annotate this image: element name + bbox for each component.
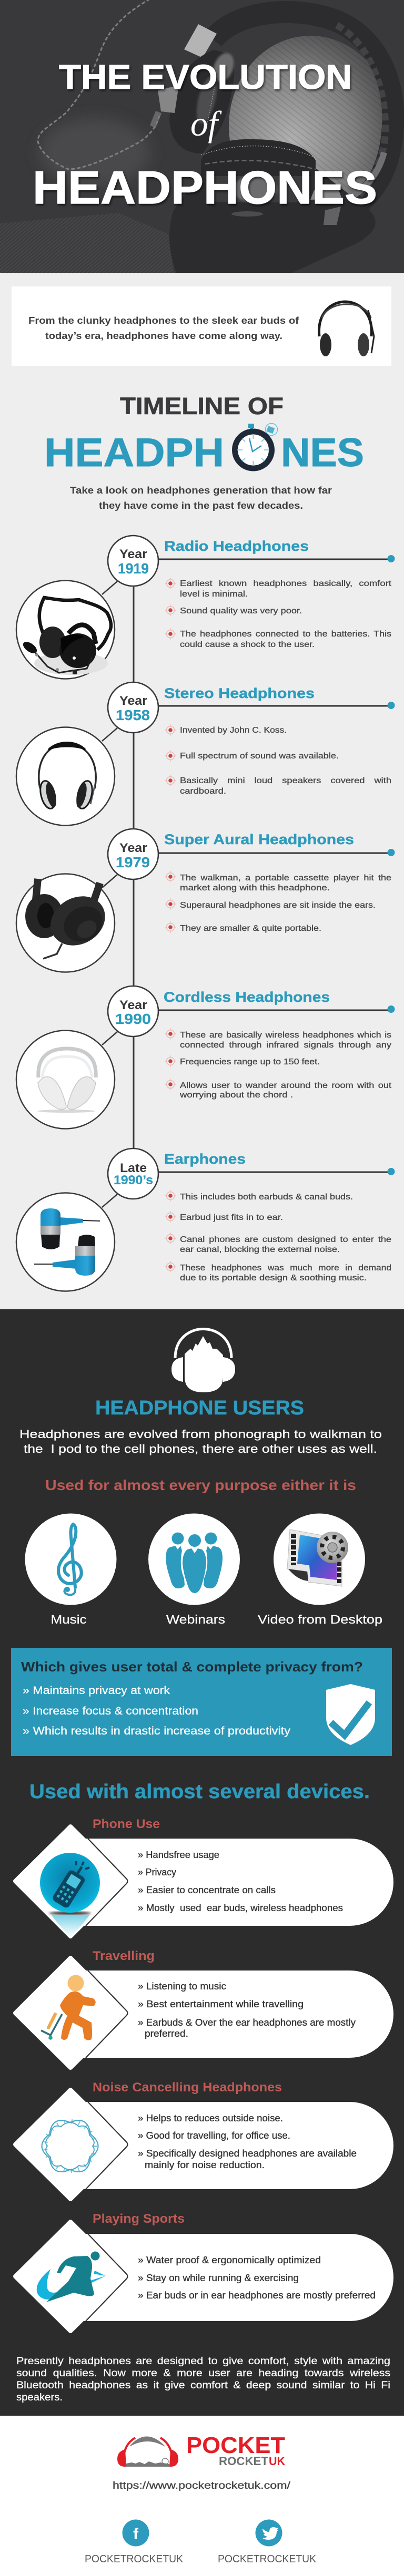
bullet list: Superaural headphones are sit inside the ears.: [180, 901, 376, 910]
list: » Listening to music: [138, 1981, 226, 1992]
heading: headphones with clock: HEADPH: [44, 430, 224, 475]
icon: runner: [37, 2252, 106, 2302]
diamond: [15, 2090, 127, 2199]
panel: earphones late 1990s: [16, 1148, 395, 1291]
privacy list: » Maintains privacy at work: [23, 1685, 170, 1697]
panel: video from desktop: [258, 1514, 382, 1626]
bullet list: The headphones connected to the batteries. This: [180, 630, 391, 639]
icon: shield check: [326, 1684, 375, 1745]
year badge: 1990’s: [114, 1173, 153, 1187]
title: Super Aural Headphones: [164, 832, 354, 847]
pill background: [79, 2102, 393, 2189]
diamond: [15, 2222, 127, 2331]
title rule: [158, 555, 395, 562]
heading: headphones with clock: NES: [281, 430, 364, 475]
pill background: [79, 1839, 393, 1926]
heading: noise cancelling: Noise Cancelling Headphones: [93, 2080, 282, 2095]
panel: privacy: [11, 1648, 392, 1756]
bullet list: Invented by John C. Koss.: [180, 726, 287, 735]
panel: super aural headphones 1979: [16, 829, 395, 972]
heading: used for almost every purpose: Used for almost every purpose either it is: [45, 1477, 356, 1493]
panel: phone use: [15, 1817, 393, 1936]
label: facebook handle: POCKETROCKETUK: [85, 2553, 184, 2565]
privacy heading: Which gives user total & complete privacy from?: [21, 1659, 363, 1675]
label: video from desktop: Video from Desktop: [258, 1613, 382, 1626]
title rule: [158, 1168, 395, 1175]
intro text: From the clunky headphones to the sleek ear buds of: [28, 315, 299, 326]
bullet list: These are basically wireless headphones which is: [180, 1031, 391, 1040]
intro paragraph: [19, 1428, 382, 1455]
panel: footer: [0, 2416, 404, 2576]
list: [138, 2113, 357, 2170]
privacy list: » Increase focus & concentration: [23, 1705, 198, 1717]
bullet list: [165, 1190, 391, 1282]
title: Cordless Headphones: [164, 989, 330, 1005]
year badge: [108, 986, 158, 1036]
title: Stereo Headphones: [164, 685, 315, 701]
list: » Ear buds or in ear headphones are mostly preferred: [138, 2290, 376, 2301]
bullet list: [165, 871, 391, 933]
list: » Privacy: [138, 1867, 176, 1877]
panel: music: [25, 1514, 117, 1626]
closing paragraph: Bluetooth headphones as it give comfort & deep sound similar to Hi Fi: [16, 2380, 390, 2391]
timeline subtitle: Take a look on headphones generation that how far: [70, 485, 332, 496]
list: » Specifically designed headphones are available: [138, 2148, 357, 2159]
icon: sound wave ring: [42, 2120, 98, 2172]
intro paragraph: Headphones are evolved from phonograph to walkman to: [19, 1428, 382, 1441]
timeline subtitle: [70, 485, 332, 511]
panel: travelling: [15, 1949, 393, 2068]
timeline vertical line: [133, 583, 135, 1162]
year badge: Year: [119, 841, 147, 855]
bullet list: market along with this headphone.: [180, 884, 330, 892]
hero title: the evolution: THE EVOLUTION: [59, 57, 352, 96]
list: » Water proof & ergonomically optimized: [138, 2255, 321, 2265]
icon: mobile phone ball: [40, 1853, 100, 1936]
closing paragraph: sound qualities. Now more & more user are heading towards wireless: [16, 2368, 390, 2379]
icon: head with headphones: [171, 1329, 235, 1392]
connector: [102, 1032, 117, 1045]
year badge: [108, 1148, 158, 1199]
bullet list: Sound quality was very poor.: [180, 607, 302, 615]
bullet list: Basically mini loud speakers covered with: [180, 776, 391, 785]
label: twitter handle: POCKETROCKETUK: [218, 2553, 317, 2565]
icon: treble clef: [58, 1524, 82, 1595]
list: » Handsfree usage: [138, 1850, 219, 1860]
year badge: [108, 682, 158, 733]
icon: stopwatch: [235, 424, 278, 468]
bullet list: could cause a shock to the user.: [180, 640, 315, 649]
bullet list: Canal phones are custom designed to enter the: [180, 1235, 391, 1244]
panel: playing sports: [15, 2212, 393, 2331]
privacy list: » Which results in drastic increase of productivity: [23, 1725, 291, 1737]
bullet list: due to its portable design & soothing music.: [180, 1274, 367, 1282]
icon: facebook: [122, 2520, 149, 2546]
connector: [102, 581, 117, 594]
intro text: [28, 315, 299, 341]
title: Radio Headphones: [164, 538, 309, 554]
photo: radio headset: [16, 580, 115, 679]
hero title: headphones: HEADPHONES: [33, 161, 377, 213]
closing paragraph: [16, 2356, 390, 2403]
bullet list: They are smaller & quite portable.: [180, 924, 321, 933]
year badge: Year: [119, 547, 147, 561]
heading: travelling: Travelling: [93, 1949, 155, 1963]
year badge: Late: [120, 1161, 147, 1175]
icon: headset: [319, 302, 374, 356]
panel: hero header: [0, 0, 404, 273]
heading: used with almost several devices: Used with almost several devices.: [29, 1781, 370, 1803]
bullet list: level is minimal.: [180, 590, 248, 599]
heading: phone use: Phone Use: [93, 1817, 160, 1831]
list: » Good for travelling, for office use.: [138, 2130, 290, 2141]
list: » Mostly used ear buds, wireless headphones: [138, 1903, 343, 1913]
diamond: [15, 1958, 127, 2068]
heading: timeline of: TIMELINE OF: [120, 393, 284, 419]
panel: noise cancelling headphones: [15, 2080, 393, 2199]
privacy list: [23, 1685, 291, 1737]
connector: [102, 875, 117, 888]
hero background photo: headphones on wood: [0, 0, 404, 273]
year badge: [108, 829, 158, 879]
title rule: [158, 702, 395, 709]
year badge: Year: [119, 694, 147, 708]
bullet list: [165, 578, 392, 649]
list: » Stay on while running & exercising: [138, 2273, 299, 2283]
icon: twitter: [256, 2520, 282, 2546]
year badge: 1979: [116, 854, 150, 870]
list: » Earbuds & Over the ear headphones are mostly: [138, 2017, 356, 2028]
label: music: Music: [50, 1613, 86, 1626]
closing paragraph: Presently headphones are designed to give comfort, style with amazing: [16, 2356, 390, 2367]
list: [138, 1850, 343, 1913]
bullet list: worrying about the chord .: [179, 1091, 293, 1100]
panel: webinars: [148, 1514, 240, 1626]
panel: stereo headphones 1958: [16, 682, 395, 825]
bullet list: Frequencies range up to 150 feet.: [180, 1058, 320, 1066]
list: mainly for noise reduction.: [145, 2160, 265, 2170]
year badge: 1958: [116, 707, 150, 723]
title rule: [158, 1005, 395, 1013]
photo: super aural headphones: [16, 874, 115, 972]
panel: cordless headphones 1990: [16, 986, 395, 1129]
bullet list: Earliest known headphones basically, comfort: [180, 579, 392, 588]
website url: https://www.pocketrocketuk.com/: [113, 2480, 291, 2491]
closing paragraph: speakers.: [16, 2392, 63, 2403]
year badge: Year: [119, 998, 147, 1012]
logo: pocket rocket uk: POCKET: [186, 2433, 285, 2458]
list: » Helps to reduces outside noise.: [138, 2113, 283, 2123]
photo: stereo headphones: [16, 727, 115, 825]
list: » Best entertainment while travelling: [138, 1999, 304, 2009]
bullet list: connected through infrared signals through any: [180, 1041, 391, 1050]
connector: [102, 1194, 117, 1207]
logo: pocket rocket uk: ROCKET: [219, 2455, 269, 2468]
logo: pocket rocket uk: UK: [269, 2455, 285, 2468]
heading: headphone users: HEADPHONE USERS: [95, 1397, 304, 1419]
panel: radio headphones 1919: [16, 536, 395, 679]
panel: intro box: [12, 286, 391, 366]
timeline subtitle: they have come in the past few decades.: [99, 500, 303, 511]
title rule: [158, 849, 395, 856]
icon: traveller with suitcase: [41, 1975, 96, 2040]
panel: dark users section background: [0, 1309, 404, 2416]
bullet list: This includes both earbuds & canal buds.: [180, 1193, 353, 1202]
icon: film and reel: [287, 1530, 348, 1586]
label: webinars: Webinars: [166, 1613, 225, 1626]
bullet list: cardboard.: [180, 787, 226, 796]
title: Earphones: [164, 1151, 246, 1167]
icon: facebook: f: [133, 2526, 139, 2543]
year badge: 1990: [115, 1011, 151, 1027]
year badge: 1919: [118, 560, 149, 577]
heading: headphones with clock: [44, 424, 364, 475]
heading: playing sports: Playing Sports: [93, 2212, 185, 2226]
bullet list: Earbud just fits in to ear.: [180, 1213, 283, 1222]
intro paragraph: the I pod to the cell phones, there are other uses as well.: [24, 1442, 377, 1455]
bullet list: These headphones was much more in demand: [180, 1264, 391, 1272]
pill background: [79, 1971, 393, 2058]
icon: three people: [166, 1533, 223, 1593]
logo: pocket rocket uk: [117, 2433, 285, 2468]
intro text: today’s era, headphones have come along way.: [45, 330, 282, 341]
bullet list: [165, 1028, 392, 1100]
bullet list: ear canal, blocking the external noise.: [180, 1245, 340, 1254]
connector: [102, 728, 117, 741]
bullet list: Full spectrum of sound was available.: [180, 752, 339, 761]
photo: blue earphones: [16, 1193, 115, 1291]
bullet list: Allows user to wander around the room with out: [180, 1081, 392, 1090]
list: » Easier to concentrate on calls: [138, 1885, 276, 1895]
year badge: [108, 536, 158, 586]
photo: cordless white headphones: [16, 1030, 115, 1129]
hero title: of: of: [190, 104, 222, 143]
bullet list: The walkman, a portable cassette player hit the: [180, 874, 391, 882]
diamond: [15, 1826, 127, 1936]
pill background: [79, 2234, 393, 2321]
list: [138, 1981, 356, 2039]
list: [138, 2255, 376, 2301]
list: preferred.: [145, 2028, 188, 2039]
bullet list: [165, 724, 391, 796]
